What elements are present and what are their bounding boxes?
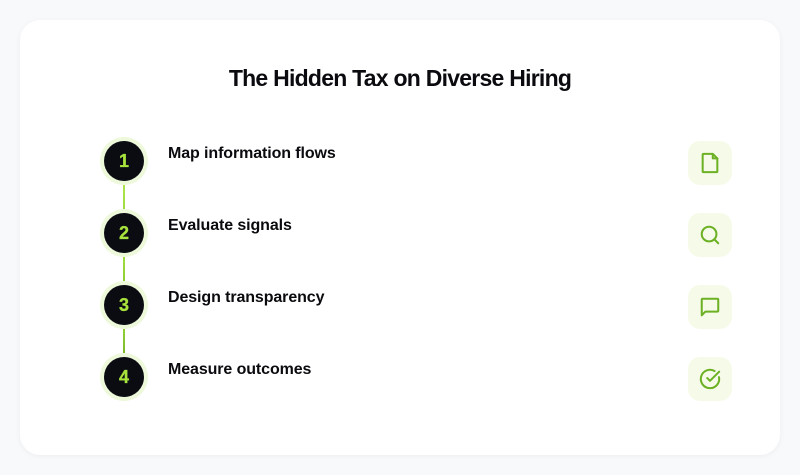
step number 1: 1 xyxy=(119,151,129,171)
step number 2 xyxy=(104,213,144,253)
connector 2-3 xyxy=(123,257,125,281)
step number 3 xyxy=(104,285,144,325)
title: The Hidden Tax on Diverse Hiring xyxy=(229,65,571,91)
step number 4: 4 xyxy=(119,367,129,387)
step number 1 xyxy=(104,141,144,181)
step label 3: Design transparency xyxy=(168,289,324,306)
icon: search xyxy=(688,213,732,257)
icon: check circle xyxy=(688,357,732,401)
connector 3-4 xyxy=(123,329,125,353)
step number 2: 2 xyxy=(119,223,129,243)
step label 4: Measure outcomes xyxy=(168,361,311,378)
icon: document xyxy=(688,141,732,185)
step number 4 xyxy=(104,357,144,397)
step number 3: 3 xyxy=(119,295,129,315)
connector 1-2 xyxy=(123,185,125,209)
step label 2: Evaluate signals xyxy=(168,217,292,234)
step label 1: Map information flows xyxy=(168,145,336,162)
icon: message xyxy=(688,285,732,329)
